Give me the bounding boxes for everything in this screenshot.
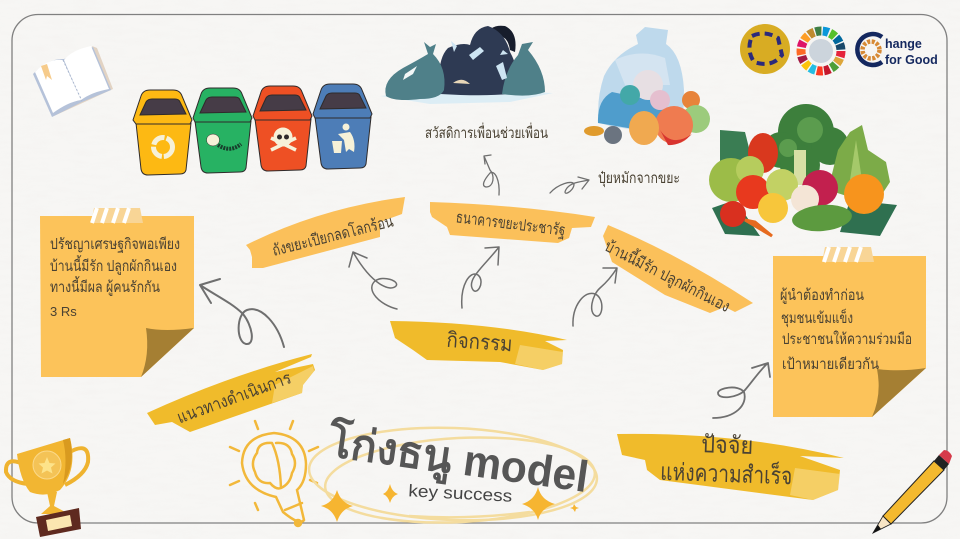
logo: emblem (740, 24, 790, 74)
label: ถังขยะเปียกลดโลกร้อน (270, 211, 395, 260)
brush: bank (430, 202, 595, 243)
note text: เป้าหมายเดียวกัน (782, 356, 879, 373)
illustration: vegetables (709, 104, 897, 236)
brush: success factors (617, 431, 844, 500)
arrows (200, 155, 770, 418)
note text: ปรัชญาเศรษฐกิจพอเพียง (50, 236, 180, 253)
note text: บ้านนี้มีรัก ปลูกผักกินเอง (50, 255, 177, 275)
panel: left note (40, 208, 194, 377)
bin: green (193, 88, 252, 173)
arrow: to bin brush (349, 252, 397, 309)
logo: Change for Good: hange (885, 37, 922, 51)
bin: red (253, 86, 312, 171)
text: compost label: ปุ๋ยหมักจากขยะ (598, 170, 680, 188)
note text (780, 287, 912, 373)
label line 1: ปัจจัย (701, 431, 754, 460)
title decoration: scribble ellipses (307, 423, 599, 529)
brush: wet bins (246, 197, 405, 268)
panel: right note (773, 247, 926, 417)
arrow: to left note (200, 279, 284, 347)
text: welfare label: สวัสดิการเพื่อนช่วยเพื่อน (425, 122, 548, 142)
note text: ทางนี้มีผล ผู้คนรักกัน (50, 276, 160, 296)
note text: ผู้นำต้องทำก่อน (780, 287, 864, 304)
logo: Change for Good: for Good (885, 53, 938, 67)
brush: home (601, 225, 753, 317)
note text: ประชาชนให้ความร่วมมือ (782, 330, 912, 348)
title: โก่งธนู model (324, 414, 592, 504)
icon: sparkles (321, 484, 579, 522)
note text (50, 236, 180, 319)
arrow: to right note (713, 363, 770, 418)
arrow: to compost (550, 177, 589, 193)
note text: ชุมชนเข้มแข็ง (781, 308, 853, 328)
arrow: to bank brush (462, 247, 499, 308)
icon: plastic bag of recycling (584, 27, 710, 145)
dry brush end (790, 468, 840, 500)
arrow: to home brush (573, 268, 617, 326)
logo: Change for Good (857, 34, 938, 67)
subtitle: key success (408, 481, 513, 506)
arrow: to welfare (483, 155, 499, 195)
icon: pencil (873, 450, 952, 533)
logo: SDG wheel (793, 23, 849, 79)
bin: yellow (133, 90, 192, 175)
bin: blue (313, 84, 372, 169)
label: บ้านนี้มีรัก ปลูกผักกินเอง (601, 235, 734, 317)
brush: guidelines (147, 354, 315, 432)
label: แนวทางดำเนินการ (174, 368, 294, 427)
illustration: brain light bulb (230, 421, 318, 526)
icon: open book (33, 46, 113, 117)
label: กิจกรรม (446, 329, 513, 356)
brush: activities (390, 321, 567, 370)
dry brush end (272, 366, 314, 403)
icon: garbage bags (380, 26, 553, 104)
note text: 3 Rs (50, 304, 77, 319)
icon: trophy (6, 438, 88, 537)
icon: four recycling bins (133, 84, 372, 175)
label line 2: แห่งความสำเร็จ (660, 457, 793, 490)
logos (740, 23, 938, 79)
dry brush end (515, 345, 563, 370)
label: ธนาคารขยะประชารัฐ (455, 209, 566, 240)
